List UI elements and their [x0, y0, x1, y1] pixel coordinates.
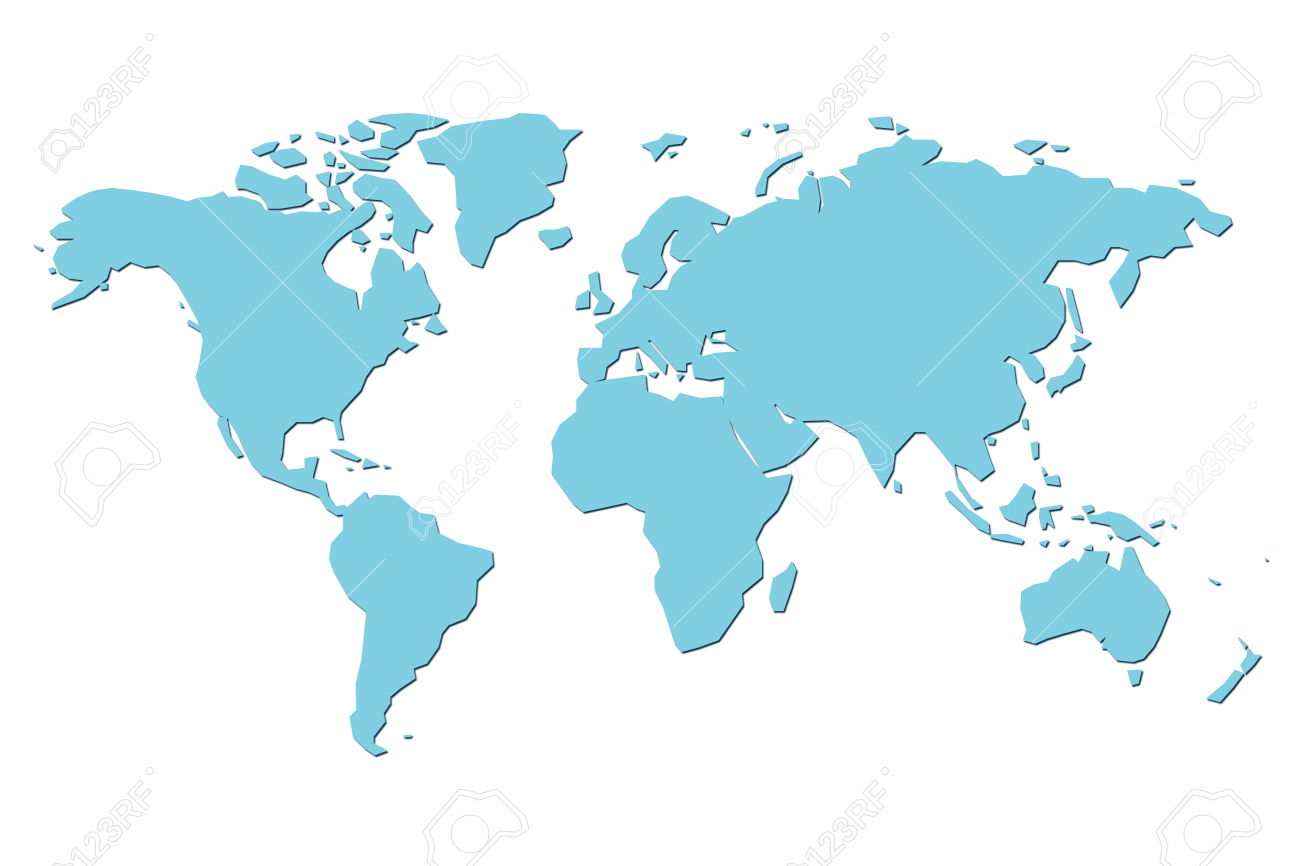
Greenland: [417, 113, 582, 267]
world map with drop shadow: [34, 113, 1268, 755]
continent: Australia, Indonesia and Oceania islands: [945, 483, 1268, 702]
continent: North America with Greenland and Arctic islands: [34, 113, 582, 515]
continent: South America: [329, 492, 493, 755]
continent: Eurasia with surrounding islands: [575, 117, 1231, 508]
watermark overlay on land: translucent logos and seam lines: [198, 55, 1268, 643]
Iceland: [539, 227, 571, 248]
continent: Africa with Madagascar: [552, 375, 796, 652]
